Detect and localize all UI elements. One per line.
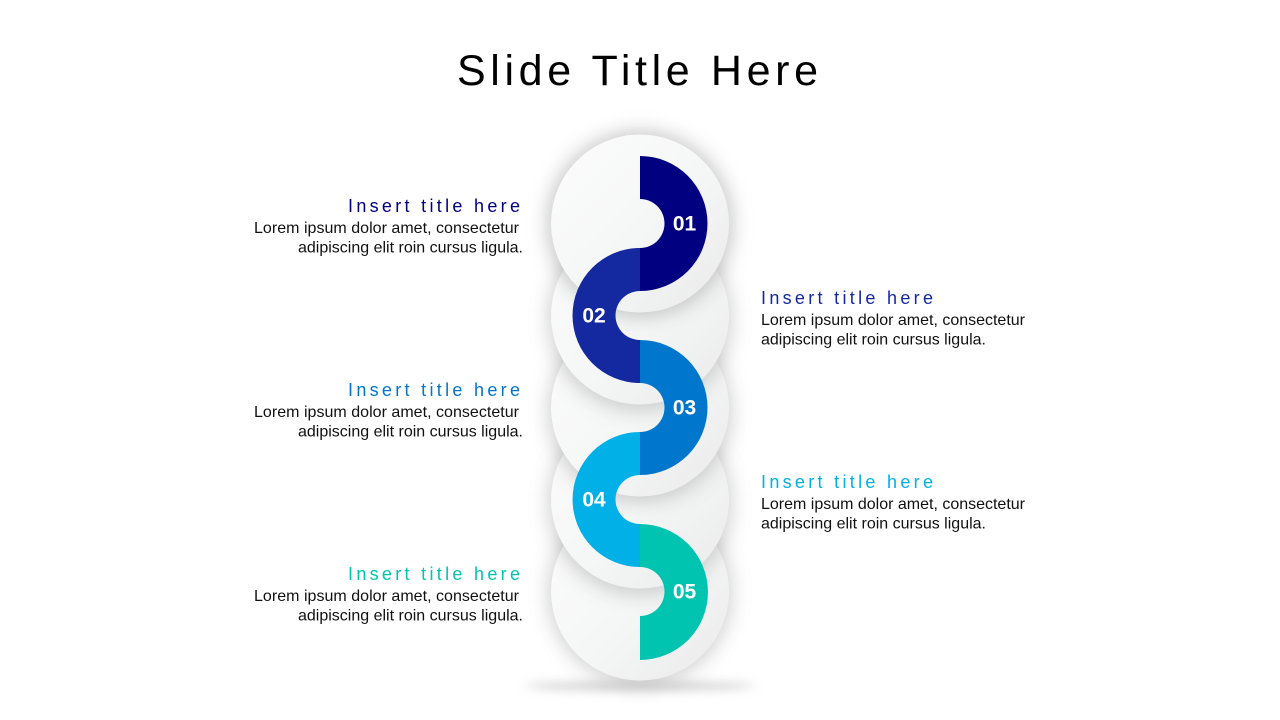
text block 03: Insert title here xyxy=(348,380,520,400)
text block 04: Insert title here xyxy=(761,472,933,492)
text block 05: Lorem ipsum dolor amet, consectetur xyxy=(254,588,520,605)
text block 03: adipiscing elit roin cursus ligula. xyxy=(298,424,523,440)
floor shadow xyxy=(525,682,755,690)
circle 4 xyxy=(549,410,731,594)
number 03: 03 xyxy=(673,396,696,420)
number 02: 02 xyxy=(582,304,606,328)
text block 02: Insert title here xyxy=(761,288,933,308)
number 04: 04 xyxy=(582,488,606,512)
text block 02: Lorem ipsum dolor amet, consectetur xyxy=(761,312,1026,329)
segment 05 xyxy=(640,524,708,660)
text block 04 xyxy=(761,472,1026,532)
circle 3 xyxy=(549,318,731,502)
number 01: 01 xyxy=(673,212,696,236)
step numbers xyxy=(582,212,696,604)
segment 01 xyxy=(640,156,708,291)
text block 05 xyxy=(254,564,523,624)
text block 03: Lorem ipsum dolor amet, consectetur xyxy=(254,404,520,421)
text block 02 xyxy=(761,288,1026,348)
text block 04: adipiscing elit roin cursus ligula. xyxy=(761,516,986,532)
text block 01: Lorem ipsum dolor amet, consectetur xyxy=(254,220,520,237)
circle stack xyxy=(548,132,732,684)
text block 02: adipiscing elit roin cursus ligula. xyxy=(761,332,986,348)
text block 04: Lorem ipsum dolor amet, consectetur xyxy=(761,496,1026,513)
text block 03 xyxy=(254,380,523,440)
text block 01 xyxy=(254,196,523,256)
text block 05: adipiscing elit roin cursus ligula. xyxy=(298,608,523,624)
title: Slide Title Here xyxy=(457,47,818,95)
segment 04 xyxy=(573,432,640,567)
number 05: 05 xyxy=(673,580,696,604)
circle 1 xyxy=(548,132,732,316)
text block 01: adipiscing elit roin cursus ligula. xyxy=(298,240,523,256)
segment 03 xyxy=(640,340,708,475)
circle 5 xyxy=(549,502,731,684)
text block 05: Insert title here xyxy=(348,564,520,584)
text block 01: Insert title here xyxy=(348,196,520,216)
circle 2 xyxy=(549,226,731,410)
segment 02 xyxy=(572,248,640,383)
ribbon xyxy=(572,156,708,660)
